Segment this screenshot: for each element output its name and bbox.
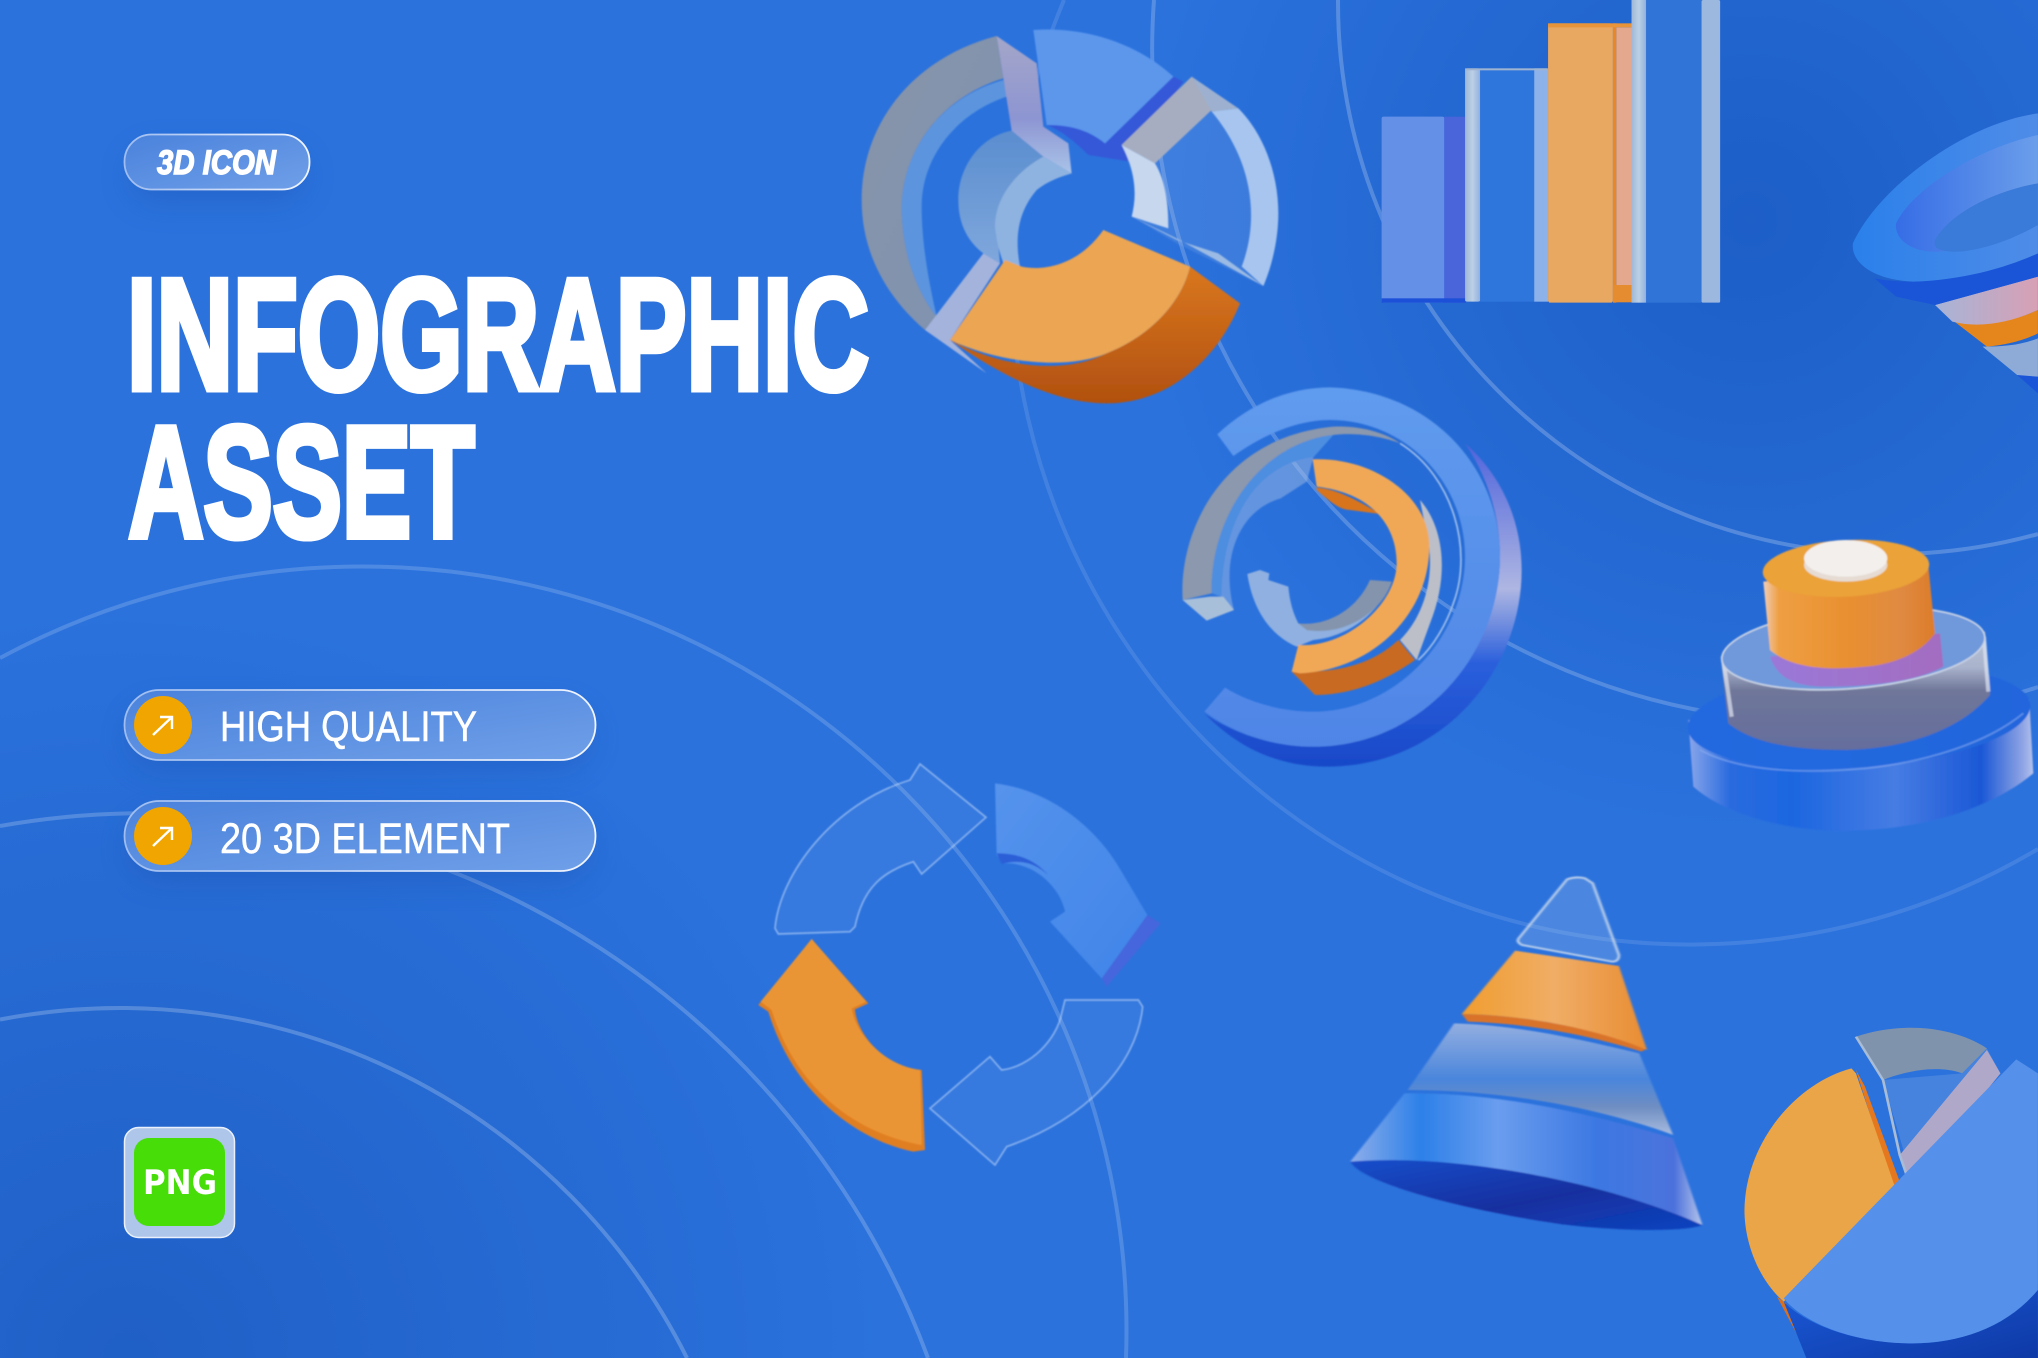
- title: [127, 247, 869, 570]
- icon: exploded donut chart: [862, 30, 1278, 403]
- badge: 3D ICON: [124, 134, 310, 202]
- title: INFOGRAPHIC: [127, 247, 869, 423]
- badge: PNG: PNG: [143, 1163, 217, 1203]
- bar 4 glass: [1632, 0, 1720, 303]
- glass arrow top left: [775, 764, 986, 934]
- feature pill: 20 3D element: 20 3D ELEMENT: [220, 815, 510, 863]
- blue arrow right: [995, 783, 1161, 987]
- feature pill: 20 3D element: [124, 801, 596, 879]
- icon: bar chart: [1382, 0, 1720, 303]
- badge: 3D ICON: 3D ICON: [157, 144, 277, 182]
- feature pill: high quality: HIGH QUALITY: [220, 703, 477, 751]
- bar 3 orange: [1548, 23, 1632, 303]
- icon: stacked cylinder: [1684, 536, 2034, 831]
- icon: cycle arrows: [758, 764, 1161, 1165]
- feature pill: high quality: [124, 690, 596, 768]
- icon: layered cone: [1350, 877, 1702, 1230]
- icon: orange arrow circle: [134, 696, 192, 754]
- bar 1 blue: [1382, 117, 1466, 303]
- badge: PNG: [124, 1128, 234, 1238]
- orange arrow: [758, 939, 925, 1152]
- title: ASSET: [128, 394, 474, 570]
- bar 2 glass: [1465, 68, 1548, 302]
- icon: concentric ring chart: [1182, 387, 1522, 767]
- icon: orange arrow circle: [134, 807, 192, 865]
- glass arrow bottom right: [930, 1000, 1143, 1165]
- icon: funnel: [1853, 113, 2038, 393]
- icon: pie chart: [1744, 1028, 2038, 1358]
